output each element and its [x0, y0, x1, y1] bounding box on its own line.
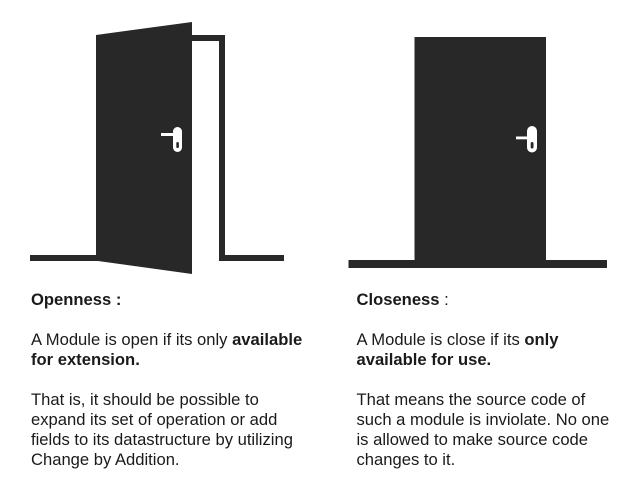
door handle [516, 126, 537, 152]
text block: openness: A Module is open if its only available [31, 330, 302, 349]
text block: closeness: changes to it. [356, 450, 455, 469]
text block: openness: expand its set of operation or add [31, 410, 277, 429]
icon: closed door [348, 37, 607, 268]
door frame and floor [30, 35, 284, 261]
text block: closeness: A Module is close if its only [356, 330, 558, 349]
text block: closeness: Closeness : [356, 290, 449, 309]
text block: closeness [356, 290, 609, 469]
text block: closeness: That means the source code of [356, 390, 585, 409]
text block: openness: fields to its datastructure by utilizing [31, 430, 293, 449]
icon: open door [30, 22, 284, 274]
door leaf [96, 22, 192, 274]
floor and door leaf [348, 37, 607, 268]
text block: closeness: available for use. [356, 350, 491, 369]
text block: openness: Openness : [31, 290, 121, 309]
text block: closeness: such a module is inviolate. No one [356, 410, 609, 429]
text block: closeness: is allowed to make source code [356, 430, 588, 449]
text block: openness [31, 290, 302, 469]
door handle [161, 127, 182, 152]
text block: openness: That is, it should be possible to [31, 390, 259, 409]
text block: openness: for extension. [31, 350, 140, 369]
text block: openness: Change by Addition. [31, 450, 180, 469]
